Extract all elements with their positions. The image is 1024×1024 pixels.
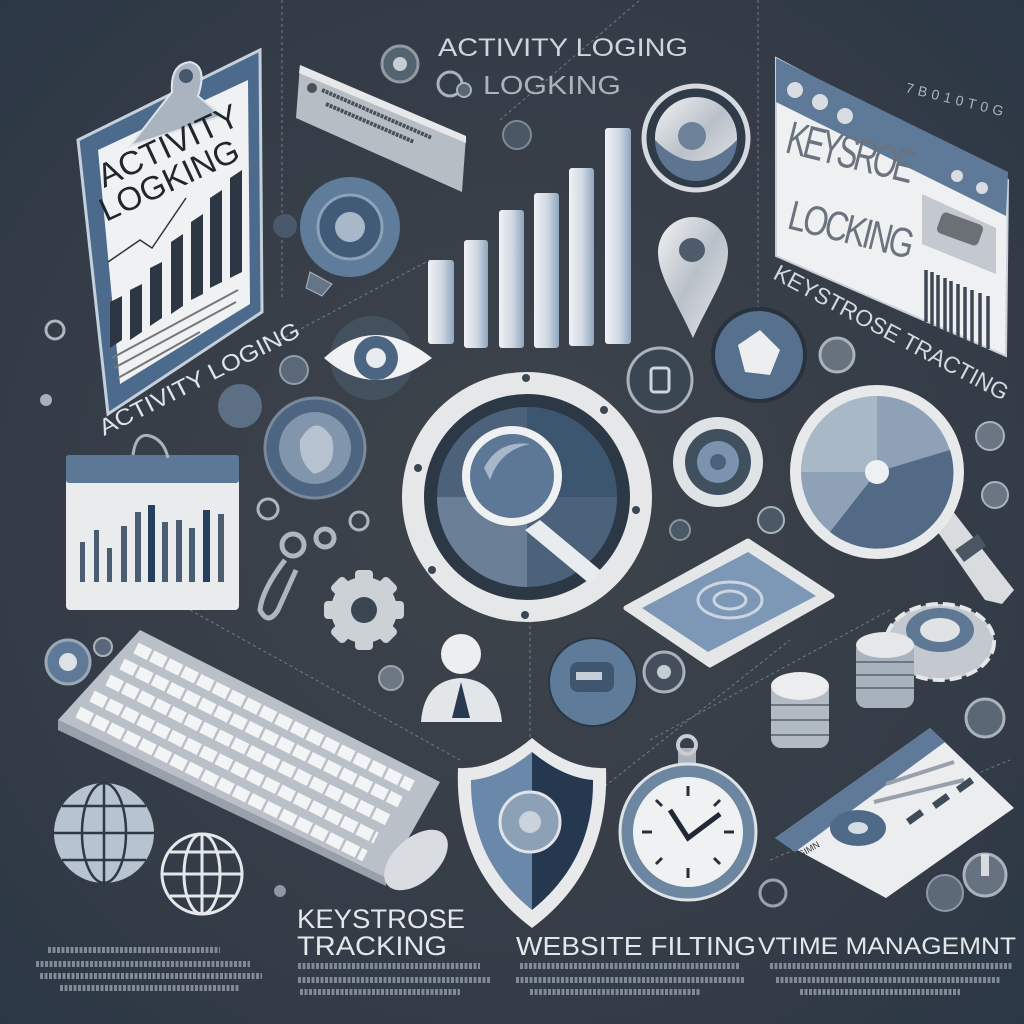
heading: activity logging on clipboard: LOGKING bbox=[93, 131, 245, 228]
heading: time management: VTIME MANAGEMNT bbox=[758, 933, 1016, 960]
bar chart: clipboard bbox=[110, 170, 242, 348]
bar chart: calendar bbox=[80, 505, 224, 582]
panel: tilted note card bbox=[296, 65, 466, 192]
icon: gear stack bbox=[886, 604, 994, 680]
icon: small badges left bbox=[40, 321, 308, 428]
label: keystrose tracting: KEYSTROSE TRACTING bbox=[770, 259, 1013, 405]
icon: small ring badges middle right bbox=[628, 309, 854, 412]
icon: stopwatch bbox=[620, 736, 756, 900]
icon: central magnifier ring bbox=[402, 372, 652, 622]
icon: eye bbox=[324, 316, 432, 400]
icon: metal coin bbox=[644, 86, 748, 190]
heading: website filtering: WEBSITE FILTING bbox=[516, 931, 756, 961]
panel: calendar chart bbox=[66, 435, 239, 610]
text: keystrose locking bbox=[781, 112, 920, 268]
icon: outline globe bbox=[162, 834, 242, 914]
panel: browser window bbox=[776, 58, 1008, 356]
heading: keystrose tracking bbox=[297, 904, 465, 961]
icon: small circles top bbox=[382, 46, 531, 149]
icon: location pin bbox=[658, 217, 728, 338]
line chart: clipboard trend bbox=[108, 198, 186, 262]
heading: keystrose tracking: KEYSTROSE bbox=[297, 904, 465, 934]
icon: person with tie bbox=[421, 634, 502, 722]
icon: solid globe bbox=[54, 783, 154, 883]
icon: large magnifier bbox=[790, 385, 1014, 604]
icon: shield bbox=[458, 738, 606, 928]
barcode bbox=[926, 270, 988, 349]
caption: top right digits: 7B010T0G bbox=[904, 79, 1005, 119]
icon: gear bbox=[324, 570, 404, 650]
panel: time management window bbox=[775, 728, 1014, 898]
connector lines bbox=[190, 0, 1010, 860]
icon: round device badge bbox=[549, 638, 684, 726]
icon: round gear badge bbox=[273, 177, 400, 296]
bar chart: center bbox=[428, 128, 631, 348]
heading: keystrose tracking: TRACKING bbox=[297, 931, 447, 961]
icon: small badges lower right bbox=[274, 854, 1006, 911]
panel: activity logging clipboard bbox=[78, 50, 262, 414]
icon: mouse bbox=[373, 818, 459, 902]
icon: coin stacks bbox=[771, 632, 1004, 748]
heading: activity logging on clipboard: ACTIVITY bbox=[91, 97, 245, 194]
text block: illegible captions bbox=[36, 950, 1012, 992]
image panel in browser bbox=[922, 194, 996, 274]
icon: small badges far right bbox=[976, 422, 1008, 508]
icon: keyboard bbox=[58, 630, 440, 886]
title: activity loging: ACTIVITY LOGING bbox=[438, 34, 688, 62]
icon: circle lock badge bbox=[265, 398, 365, 498]
title: logking with icon: LOGKING bbox=[483, 70, 621, 100]
icon: target ring bbox=[670, 417, 784, 540]
text: keystrose locking: LOCKING bbox=[784, 191, 919, 268]
label: activity loging side text: ACTIVITY LOGING bbox=[94, 317, 304, 440]
icon: small badges lower left bbox=[46, 638, 403, 690]
panel: time management window: GIMN bbox=[796, 839, 821, 860]
title: logking with icon bbox=[438, 70, 621, 100]
icon: scissor hook and small badge bbox=[258, 499, 368, 618]
icon: tablet bbox=[626, 541, 832, 665]
text: keystrose locking: KEYSROE bbox=[781, 112, 920, 194]
icon: clipboard clip bbox=[130, 62, 222, 146]
